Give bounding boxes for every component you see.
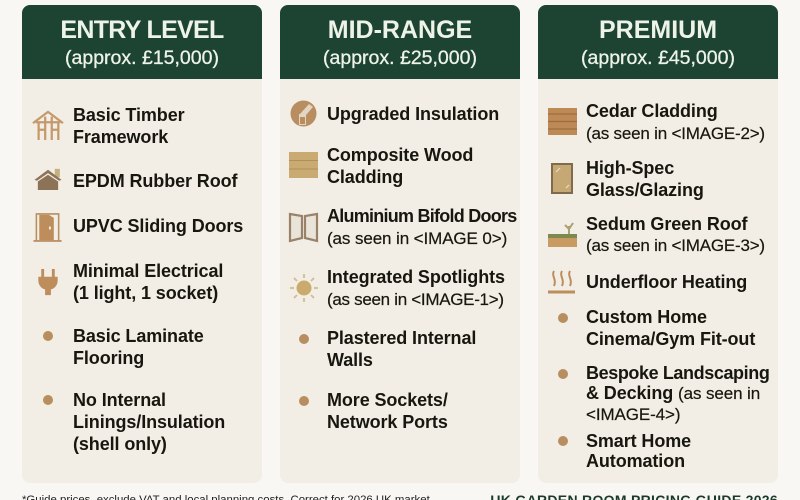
panel: entry level — [22, 5, 262, 483]
heading: premium: (approx. £45,000) — [581, 47, 735, 69]
text: upgraded insulation: Upgraded Insulation — [327, 104, 499, 124]
text: integrated spotlights — [327, 267, 505, 309]
text: composite wood cladding: Cladding — [327, 167, 403, 187]
heading: premium — [538, 5, 778, 79]
text: cedar cladding — [586, 101, 765, 143]
text: cedar cladding: Cedar Cladding — [586, 101, 718, 121]
icon: spotlight — [290, 274, 318, 302]
text: basic timber framework — [73, 105, 185, 147]
text: landscaping and decking: Bespoke Landscaping — [586, 363, 769, 383]
text: plastered internal walls — [327, 328, 476, 370]
text: integrated spotlights: Integrated Spotlights — [327, 267, 505, 287]
icon: plug — [38, 268, 58, 296]
icon: timber frame — [32, 110, 64, 140]
text: high-spec glazing — [586, 158, 704, 200]
heading: entry level: ENTRY LEVEL — [60, 16, 224, 44]
icon: cedar cladding — [548, 108, 577, 135]
bullet — [558, 369, 568, 379]
text: cinema and gym — [586, 307, 756, 349]
panel: mid-range — [280, 5, 520, 483]
heading: entry level: (approx. £15,000) — [65, 47, 219, 69]
text: landscaping and decking — [586, 363, 769, 424]
icon: bifold doors — [288, 212, 318, 242]
heading: mid-range: (approx. £25,000) — [323, 47, 477, 69]
text: minimal electrical: Minimal Electrical — [73, 261, 223, 281]
bullet — [43, 331, 53, 341]
text: basic laminate flooring — [73, 326, 204, 368]
text: smart home automation: Smart Home — [586, 431, 691, 451]
text: smart home automation: Automation — [586, 451, 685, 471]
text: plastered internal walls: Plastered Internal — [327, 328, 476, 348]
text: plastered internal walls: Walls — [327, 350, 373, 370]
heading: mid-range — [280, 5, 520, 79]
bullet — [558, 313, 568, 323]
text: sockets and ports: More Sockets/ — [327, 390, 448, 410]
text: no internal linings — [73, 390, 225, 454]
bullet — [43, 395, 53, 405]
bullet — [558, 436, 568, 446]
text: basic laminate flooring: Flooring — [73, 348, 144, 368]
text: sedum green roof: Sedum Green Roof — [586, 214, 747, 234]
icon: underfloor heating — [548, 270, 575, 294]
text: epdm rubber roof: EPDM Rubber Roof — [73, 171, 237, 191]
text: landscaping and decking: <IMAGE-4>) — [586, 405, 680, 424]
text: composite wood cladding: Composite Wood — [327, 145, 473, 165]
text: minimal electrical — [73, 261, 223, 303]
text: cinema and gym: Cinema/Gym Fit-out — [586, 328, 755, 348]
heading: mid-range: MID-RANGE — [328, 16, 472, 44]
text: upvc sliding doors: UPVC Sliding Doors — [73, 216, 243, 236]
icon: composite cladding — [289, 152, 318, 178]
text: basic timber framework: Basic Timber — [73, 105, 185, 125]
heading: entry level — [22, 5, 262, 79]
text: cedar cladding: (as seen in <IMAGE-2>) — [586, 124, 765, 142]
heading: premium: PREMIUM — [599, 16, 717, 44]
text: sedum green roof: (as seen in <IMAGE-3>) — [586, 236, 765, 255]
text: sockets and ports: Network Ports — [327, 412, 448, 432]
text: aluminium bifold doors: (as seen in <IMAGE 0>) — [327, 228, 507, 248]
text: minimal electrical: (1 light, 1 socket) — [73, 283, 218, 303]
text: aluminium bifold doors: Aluminium Bifold Doors — [327, 206, 516, 226]
icon: insulation — [290, 100, 316, 126]
text: landscaping and decking: & Decking (as seen in — [586, 383, 760, 403]
text: integrated spotlights: (as seen in <IMAGE-1>) — [327, 290, 504, 308]
icon: roof — [34, 168, 62, 190]
text: no internal linings: (shell only) — [73, 434, 167, 454]
text: high-spec glazing: Glass/Glazing — [586, 180, 704, 200]
text: sedum green roof — [586, 214, 765, 255]
text: high-spec glazing: High-Spec — [586, 158, 674, 178]
bullet — [299, 334, 309, 344]
icon: sedum roof — [548, 222, 577, 247]
text: no internal linings: No Internal — [73, 390, 166, 410]
icon: glazing — [551, 163, 573, 194]
text: basic laminate flooring: Basic Laminate — [73, 326, 204, 346]
text: smart home automation — [586, 431, 691, 471]
icon: door — [33, 213, 62, 242]
text: no internal linings: Linings/Insulation — [73, 412, 225, 432]
text: sockets and ports — [327, 390, 448, 432]
panel: premium — [538, 5, 778, 483]
text: aluminium bifold doors — [327, 206, 516, 248]
text: composite wood cladding — [327, 145, 473, 187]
bullet — [299, 396, 309, 406]
text: underfloor heating: Underfloor Heating — [586, 272, 747, 292]
text: basic timber framework: Framework — [73, 127, 168, 147]
text: cinema and gym: Custom Home — [586, 307, 707, 327]
